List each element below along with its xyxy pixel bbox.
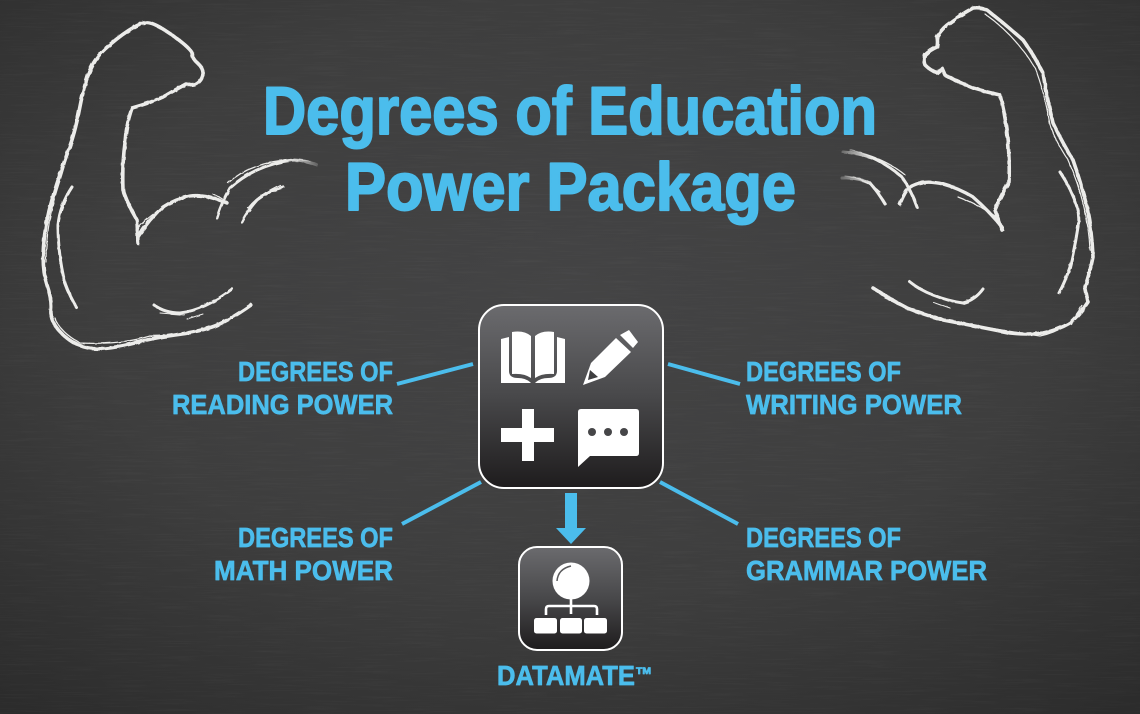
icon: speech bubble [578,409,639,467]
label: math power [214,522,393,586]
icon: left chalk flexed arm [43,22,317,349]
label: writing power: DEGREES OF [746,356,901,387]
icon: globe and hierarchy [534,562,607,634]
label: grammar power: DEGREES OF [746,522,901,553]
label: reading power [172,356,393,420]
label: math power: DEGREES OF [238,522,393,553]
title: Degrees of Education [263,73,877,149]
icon: open book [501,332,565,383]
label: writing power [746,356,962,420]
arrow down to datamate [556,493,586,544]
label: grammar power: GRAMMAR POWER [746,555,987,586]
title [263,73,877,225]
title: Power Package [345,149,796,225]
icon: pencil [583,330,638,385]
label: datamate: DATAMATE [497,660,635,691]
label: datamate: TM [636,666,651,676]
icon: plus [501,409,554,461]
label: grammar power [746,522,987,586]
label: reading power: DEGREES OF [238,356,393,387]
label: writing power: WRITING POWER [746,389,962,420]
icon: right chalk flexed arm [842,8,1093,336]
connector lines [397,364,740,524]
panel: power package tile [479,305,663,488]
panel: datamate tile [519,547,622,650]
label: reading power: READING POWER [172,389,393,420]
label: math power: MATH POWER [214,555,393,586]
